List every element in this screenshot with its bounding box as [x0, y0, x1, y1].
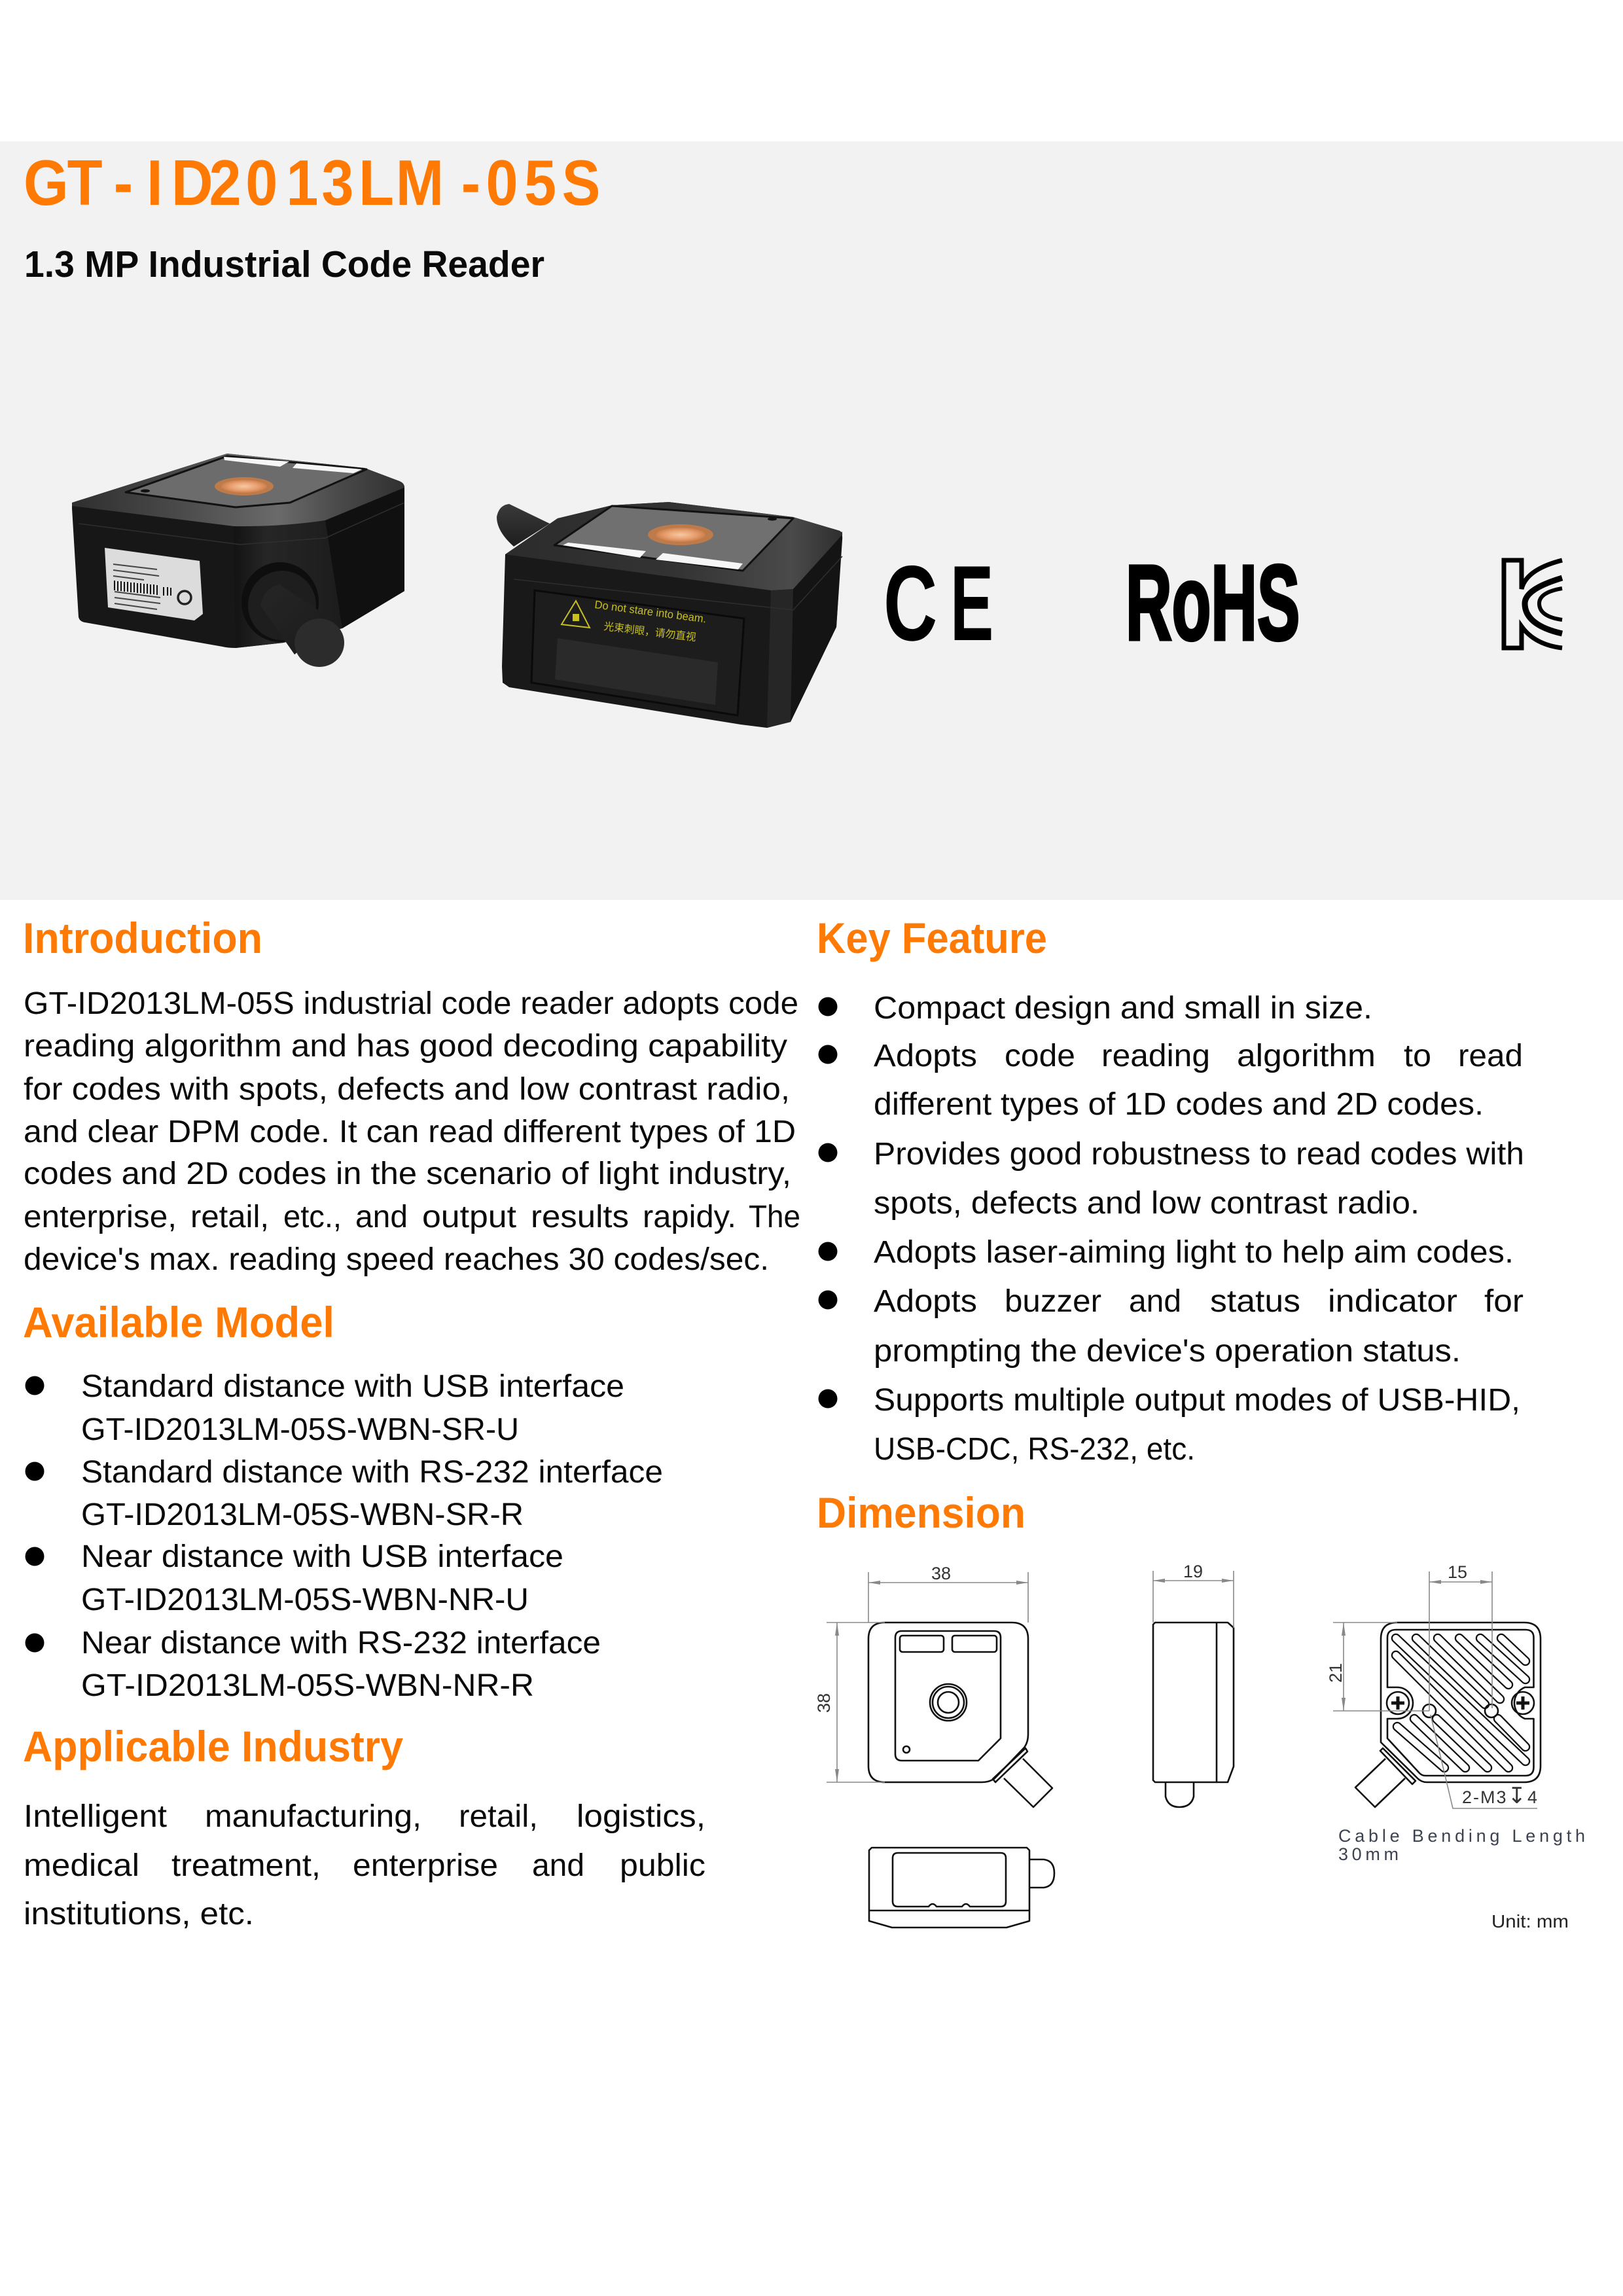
list: key features: different types of 1D codes and 2D codes.	[874, 1087, 1484, 1122]
dimension label: 38 width: 38	[931, 1564, 951, 1583]
text block: introduction: reading algorithm and has good decoding capability	[24, 1029, 787, 1064]
heading: Key Feature: Key Feature	[817, 914, 1047, 962]
KC mark	[1504, 560, 1562, 648]
list: key features: Compact design and small in size.	[874, 991, 1372, 1026]
text block: introduction: results	[531, 1200, 629, 1234]
text block: introduction: The	[749, 1200, 800, 1234]
text block: applicable industry: public	[620, 1848, 705, 1883]
dimension drawing: top view	[814, 1564, 1052, 1807]
text block: applicable industry: treatment,	[171, 1848, 321, 1883]
list: key features: Adopts	[874, 1284, 977, 1319]
CE mark: E	[950, 544, 993, 663]
list: key features: read	[1458, 1039, 1523, 1073]
icon: laser warning	[562, 601, 590, 628]
text block: applicable industry: manufacturing,	[205, 1799, 421, 1834]
product photo: device front view	[497, 502, 842, 728]
CE mark	[883, 543, 993, 663]
list: available models: Standard distance with RS-232 interface	[81, 1455, 663, 1490]
note: cable bending length: Cable Bending Length	[1338, 1826, 1585, 1846]
list: key features: Adopts laser-aiming light to help aim codes.	[874, 1235, 1514, 1270]
list: key features	[818, 991, 1524, 1467]
RoHS mark: RoHS	[1126, 543, 1300, 662]
list: available models: GT-ID2013LM-05S-WBN-NR-U	[81, 1583, 529, 1617]
text block: introduction: GT-ID2013LM-05S industrial code reader adopts code	[24, 986, 798, 1021]
dimension label: 21: 21	[1326, 1663, 1346, 1683]
heading: Dimension: Dimension	[817, 1488, 1026, 1537]
dimension label: 38 height: 38	[814, 1693, 834, 1713]
text block: introduction: output	[422, 1200, 516, 1234]
product photo: device rear view	[72, 454, 404, 667]
text block: introduction: codes and 2D codes in the scenario of light industry,	[24, 1157, 791, 1191]
list: available models	[25, 1369, 663, 1703]
list: key features: for	[1484, 1284, 1524, 1319]
text block: introduction: and clear DPM code. It can read different types of 1D	[24, 1115, 796, 1149]
CE mark: C	[883, 543, 937, 663]
title: GT-ID2013LM-05S	[24, 147, 600, 219]
text block: applicable industry: Intelligent	[24, 1799, 167, 1834]
list: key features: prompting the device's operation status.	[874, 1334, 1461, 1369]
list: key features: Adopts	[874, 1039, 977, 1073]
heading: Introduction: Introduction	[23, 914, 262, 962]
text block: introduction	[24, 986, 800, 1277]
text block: applicable industry: retail,	[459, 1799, 538, 1834]
text block: applicable industry	[24, 1799, 705, 1931]
list: key features: to	[1404, 1039, 1431, 1073]
heading: Available Model: Available Model	[23, 1298, 334, 1346]
text block: introduction: and	[355, 1200, 408, 1234]
dimension drawing: side view	[1153, 1562, 1234, 1807]
subtitle: 1.3 MP Industrial Code Reader	[24, 243, 544, 285]
laser warning text	[594, 598, 707, 643]
list: key features: indicator	[1328, 1284, 1457, 1319]
note: cable bending length	[1338, 1826, 1585, 1864]
heading: Applicable Industry: Applicable Industry	[23, 1722, 403, 1770]
list: available models: GT-ID2013LM-05S-WBN-NR-R	[81, 1668, 534, 1703]
list: key features: algorithm	[1237, 1039, 1376, 1073]
text block: applicable industry: enterprise	[353, 1848, 498, 1883]
text block: introduction: enterprise,	[24, 1200, 177, 1234]
text block: introduction: retail,	[190, 1200, 269, 1234]
list: key features: Provides good robustness to read codes with	[874, 1137, 1524, 1172]
note: unit: Unit: mm	[1491, 1911, 1569, 1931]
list: key features: spots, defects and low contrast radio.	[874, 1186, 1419, 1221]
text block: applicable industry: logistics,	[577, 1799, 705, 1834]
text block: introduction: etc.,	[283, 1200, 342, 1234]
list: available models: GT-ID2013LM-05S-WBN-SR-U	[81, 1412, 519, 1447]
list: available models: Standard distance with USB interface	[81, 1369, 624, 1404]
thread callout: 2-M3↧4	[1462, 1784, 1537, 1808]
dimension drawing: rear view with mounting holes	[1326, 1562, 1541, 1808]
list: key features: reading	[1101, 1039, 1210, 1073]
list: key features: buzzer	[1005, 1284, 1101, 1319]
header band	[0, 141, 1623, 900]
text block: introduction: device's max. reading speed reaches 30 codes/sec.	[24, 1242, 769, 1277]
list: key features: code	[1005, 1039, 1075, 1073]
list: available models: Near distance with USB interface	[81, 1539, 563, 1574]
laser warning text: Do not stare into beam.	[594, 598, 707, 625]
text block: introduction: rapidy.	[643, 1200, 736, 1234]
list: available models: GT-ID2013LM-05S-WBN-SR-R	[81, 1498, 524, 1532]
text block: introduction: for codes with spots, defects and low contrast radio,	[24, 1072, 790, 1107]
list: available models: Near distance with RS-232 interface	[81, 1626, 601, 1660]
dimension label: 15: 15	[1448, 1562, 1467, 1582]
dimension label: 19: 19	[1183, 1562, 1203, 1581]
list: key features: and	[1129, 1284, 1181, 1319]
note: cable bending length: 30mm	[1338, 1844, 1399, 1864]
text block: applicable industry: institutions, etc.	[24, 1897, 254, 1931]
list: key features: USB-CDC, RS-232, etc.	[874, 1432, 1195, 1467]
text block: applicable industry: and	[532, 1848, 584, 1883]
laser warning text: 光束刺眼，请勿直视	[603, 620, 697, 643]
dimension drawing: bottom view	[869, 1848, 1054, 1928]
list: key features: Supports multiple output modes of USB-HID,	[874, 1383, 1520, 1418]
text block: applicable industry: medical	[24, 1848, 139, 1883]
list: key features: status	[1210, 1284, 1300, 1319]
